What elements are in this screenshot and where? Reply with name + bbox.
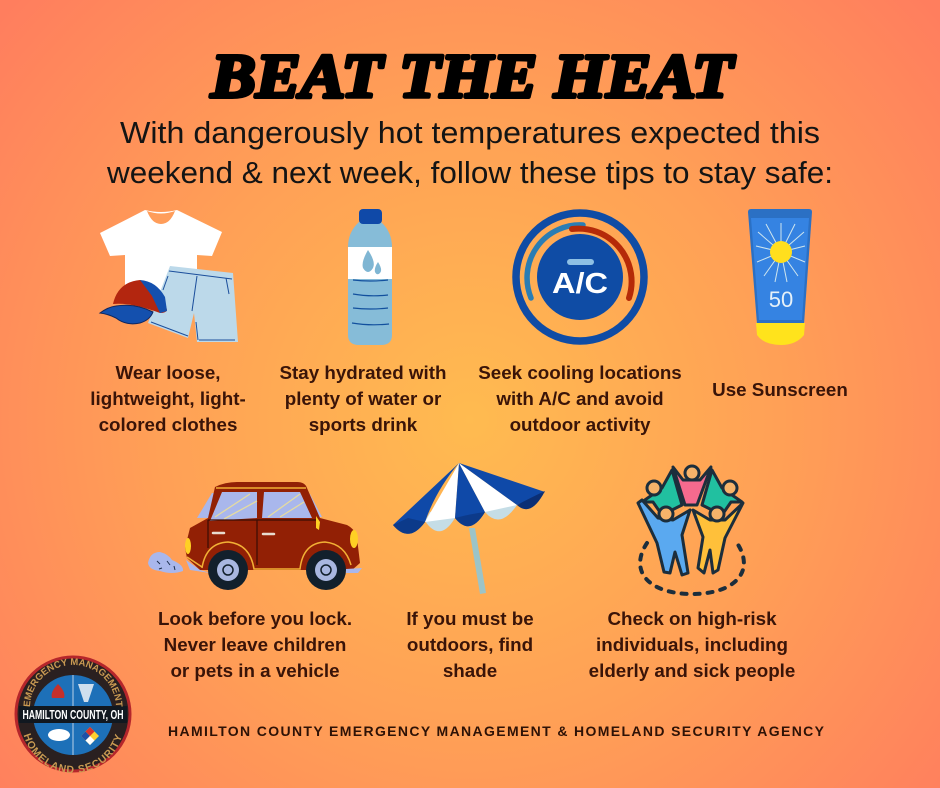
subtitle	[106, 115, 833, 190]
icon: sunscreen: 50	[769, 287, 793, 312]
caption: cooling: with A/C and avoid	[495, 388, 664, 409]
caption: check on people: individuals, including	[596, 634, 788, 655]
caption: shade: If you must be	[406, 608, 534, 629]
logo badge: HOMELAND SECURITY	[24, 733, 122, 773]
icon: clothes	[100, 210, 238, 342]
icon: car	[148, 482, 362, 590]
caption: car: or pets in a vehicle	[170, 660, 340, 681]
icon: A/C dial: A/C	[552, 268, 608, 300]
caption: car: Look before you lock.	[158, 608, 352, 629]
icon: water bottle	[348, 209, 392, 345]
icon: sunscreen	[748, 209, 812, 345]
caption: check on people: Check on high-risk	[607, 608, 777, 629]
caption: shade: shade	[443, 660, 497, 681]
caption: sunscreen: Use Sunscreen	[712, 379, 848, 400]
subtitle: weekend & next week, follow these tips to stay safe:	[106, 155, 833, 190]
caption: hydrate: sports drink	[309, 414, 418, 435]
icon: people circle	[638, 466, 744, 594]
title: BEAT THE HEAT	[210, 43, 735, 111]
subtitle: With dangerously hot temperatures expected this	[120, 115, 820, 150]
icon: umbrella	[393, 463, 545, 594]
caption: hydrate: plenty of water or	[285, 388, 442, 409]
caption: check on people: elderly and sick people	[589, 660, 795, 681]
icon: A/C dial	[516, 213, 644, 341]
caption: cooling: Seek cooling locations	[478, 362, 682, 383]
logo badge: HAMILTON COUNTY, OH	[22, 708, 124, 722]
caption: shade: outdoors, find	[407, 634, 533, 655]
caption: hydrate: Stay hydrated with	[280, 362, 446, 383]
caption: clothes: lightweight, light-	[90, 388, 246, 409]
caption: car: Never leave children	[164, 634, 346, 655]
caption: clothes: colored clothes	[99, 414, 237, 435]
logo badge	[14, 656, 132, 773]
footer agency name: HAMILTON COUNTY EMERGENCY MANAGEMENT & HOMELAND SECURITY AGENCY	[168, 723, 825, 739]
caption: clothes: Wear loose,	[115, 362, 221, 383]
caption: cooling: outdoor activity	[510, 414, 651, 435]
logo badge: EMERGENCY MANAGEMENT	[23, 658, 123, 707]
